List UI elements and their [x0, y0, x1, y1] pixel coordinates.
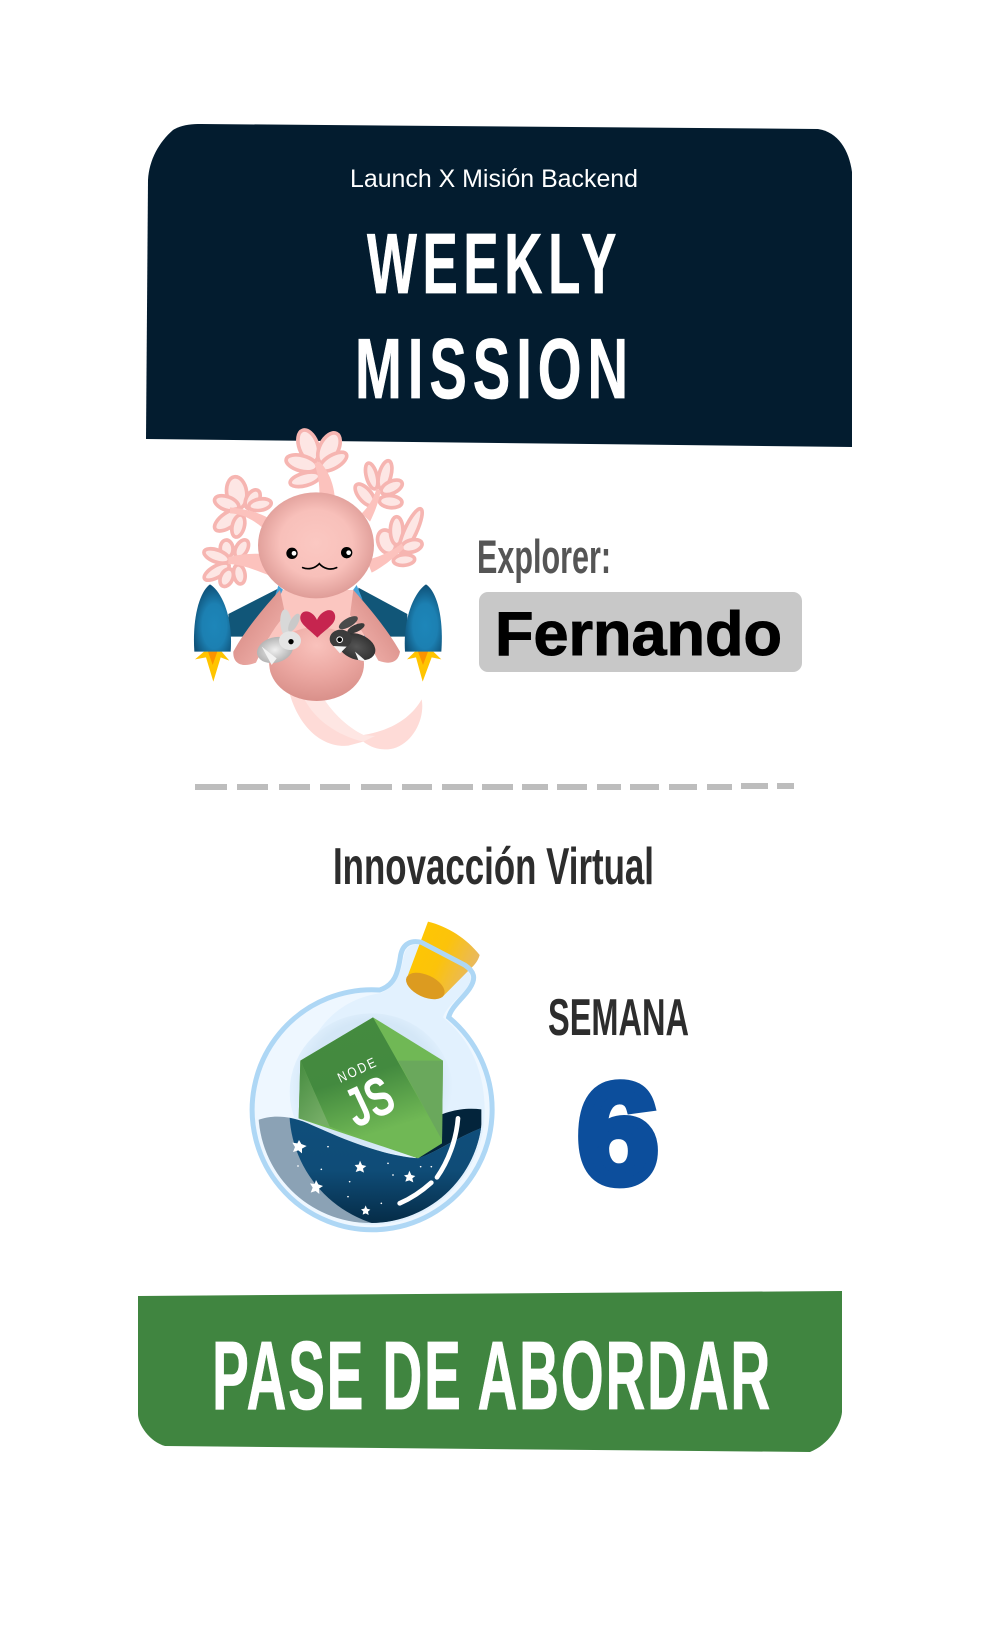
- name: Fernando: Fernando: [495, 600, 782, 669]
- flask outline: [252, 942, 492, 1230]
- axolotl body: [233, 492, 400, 701]
- axolotl eyes: [286, 547, 352, 559]
- glass highlight: [400, 1118, 458, 1203]
- stars: [292, 1140, 432, 1215]
- illustration: Node.js flask: [252, 922, 492, 1237]
- header subtitle: Launch X Misión Backend: [350, 165, 638, 193]
- node label: JS: [335, 1063, 404, 1139]
- flask glass: [252, 942, 492, 1230]
- dashed divider: [195, 783, 794, 790]
- label: SEMANA: SEMANA: [548, 989, 689, 1047]
- flask inner tint: [301, 945, 485, 1225]
- rocket left: [194, 584, 231, 682]
- heading: Innovacción Virtual: Innovacción Virtual: [333, 838, 654, 896]
- axolotl tail: [290, 695, 422, 749]
- name badge: [479, 592, 802, 672]
- header panel: [146, 124, 852, 447]
- label: Explorer: Explorer:: [477, 530, 611, 583]
- axolotl mouth: [303, 564, 337, 569]
- heart: [300, 610, 335, 638]
- grey bunny: [254, 609, 302, 667]
- week number: 6: [578, 1055, 658, 1212]
- rocket wings: [228, 585, 407, 637]
- title line: WEEKLY: WEEKLY: [367, 217, 622, 312]
- boarding pass banner: [138, 1291, 842, 1452]
- flask water back: [411, 1109, 481, 1177]
- node label: NODE: [335, 1053, 380, 1086]
- flask water: [258, 1116, 481, 1223]
- title line: MISSION: MISSION: [355, 322, 634, 417]
- cube shadow: [290, 1013, 453, 1170]
- cork: [402, 922, 480, 1005]
- illustration: axolotl with rockets and bunnies: [194, 427, 442, 749]
- rocket right: [405, 584, 442, 682]
- axolotl gills: [202, 427, 426, 589]
- dark bunny: [330, 614, 379, 665]
- node cube: [299, 1017, 443, 1158]
